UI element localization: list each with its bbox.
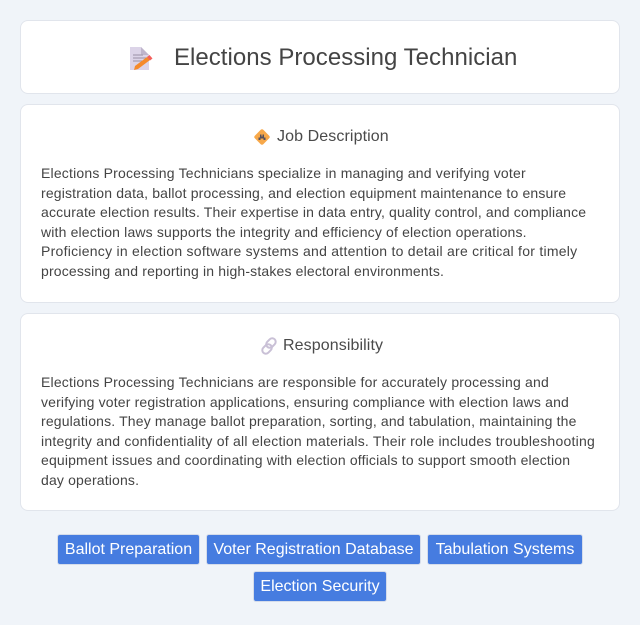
text block: accurate election results. Their expertise in data entry, quality control, and compliance [41,204,586,220]
icon: document with pencil [130,47,152,70]
tags [57,534,583,602]
text block [41,374,595,488]
text block [41,165,586,279]
text block: Elections Processing Technicians specialize in managing and verifying voter [41,165,526,181]
tag: voter registration database [206,534,421,565]
text block: with election laws supports the integrity and efficiency of election operations. [41,224,527,240]
tag: election security [253,571,387,602]
tag: tabulation systems: Tabulation Systems [436,541,574,558]
icon: puzzle diamond [254,129,270,145]
icon: link [261,337,277,355]
text block: verifying voter registration applications, ensuring compliance with election laws and [41,394,569,410]
text block: regulations. They manage ballot preparation, sorting, and tabulation, maintaining the [41,413,577,429]
heading: Responsibility [283,337,383,354]
text block: equipment issues and coordinating with election officials to support smooth election [41,452,570,468]
tag: election security: Election Security [260,578,380,595]
tag: ballot preparation: Ballot Preparation [65,541,192,558]
tag: ballot preparation [57,534,200,565]
text block: day operations. [41,472,139,488]
tag: tabulation systems [427,534,583,565]
text block: Elections Processing Technicians are responsible for accurately processing and [41,374,549,390]
tag: voter registration database: Voter Registration Database [213,541,414,558]
text block: Proficiency in election software systems and attention to detail are critical for timely [41,243,577,259]
text block: registration data, ballot processing, and election equipment maintenance to ensure [41,184,566,200]
panel: title [20,20,620,94]
text block: integrity and confidentiality of all election materials. Their role includes troubleshooting [41,432,595,448]
text block: processing and reporting in high-stakes electoral environments. [41,262,444,278]
heading: Job Description [277,128,389,145]
panel: responsibility [20,313,620,511]
title: Elections Processing Technician [174,44,517,71]
panel: job description [20,104,620,303]
